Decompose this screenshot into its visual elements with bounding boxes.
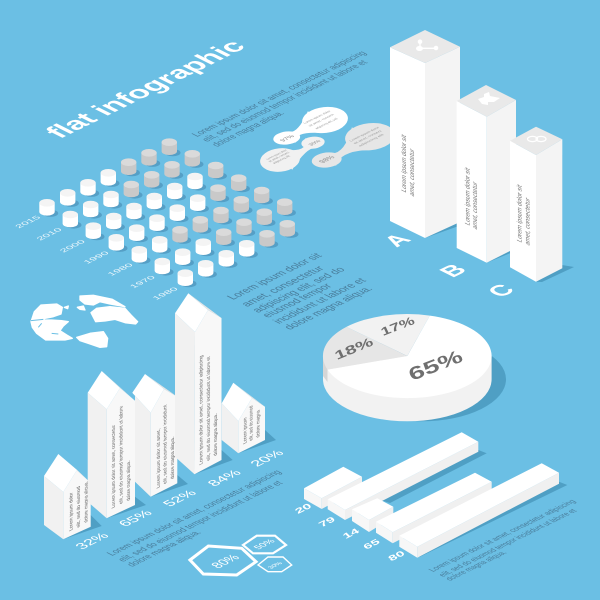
- year labels: 1980: [150, 286, 180, 301]
- bar value labels: 65: [361, 537, 382, 551]
- bar letters A B C: A: [378, 231, 417, 250]
- text block: centre paragraph: adipiscing elit, sed do: [250, 266, 348, 314]
- blob: white 97%: adipiscing elit, sed: [314, 117, 339, 130]
- text block: lower left paragraph: dolore magna aliqua.: [125, 529, 204, 568]
- blob: grey 98%: adipiscing elit: [357, 133, 385, 147]
- blob: white 97%: Lorem ipsum dolor: [302, 110, 333, 124]
- year labels: [13, 214, 180, 301]
- house bar 20%: [222, 383, 276, 453]
- pie chart: [323, 313, 506, 421]
- bar A text: amet, consectetur: [408, 146, 416, 198]
- text block: centre paragraph: eiusmod tempor: [260, 282, 335, 319]
- icon: molecule: [416, 40, 438, 50]
- bar C: [510, 127, 574, 282]
- year labels: 2000: [57, 239, 88, 254]
- year labels: 2015: [13, 214, 43, 229]
- blob: grey 98%: 98%: [318, 155, 337, 164]
- bar C text: Lorem ipsum dolor sit: [515, 182, 523, 244]
- bar value labels: 79: [317, 515, 337, 529]
- blob: light 30%: adipiscing elit: [272, 155, 291, 164]
- bar 80: [399, 463, 567, 558]
- text block: centre paragraph: amet, consectetur: [239, 265, 328, 308]
- house bar 65%: [88, 371, 146, 518]
- blob: grey 98%: [311, 121, 396, 169]
- cylinder row 2015: [39, 138, 180, 217]
- text: dolore magna aliqua.: [126, 459, 132, 502]
- hexagon 80%: 80%: [207, 552, 243, 570]
- house percentage labels: 65%: [115, 508, 156, 528]
- horizontal isometric bar chart: [293, 432, 567, 563]
- hexagon 50%: 50%: [251, 538, 277, 551]
- pie slice 17%: [346, 314, 430, 356]
- bar value labels: 14: [341, 526, 363, 540]
- bar letters A B C: [378, 231, 521, 301]
- text: elit, sed do eiusmod tempor incididunt ut labore et: [206, 355, 212, 462]
- text: elit, sed do eiusmod: [249, 404, 254, 442]
- cylinder row 1990: [109, 174, 250, 252]
- title: flat infographic: [39, 36, 252, 142]
- text: elit, sed do eiusmod tempor incididunt: [163, 403, 168, 485]
- text: dolore magna: [256, 408, 261, 439]
- text: Lorem ipsum dolor sit amet, consectetur: [111, 423, 117, 509]
- text block: lower left paragraph: elit, sed do eiusmod tempor incididunt ut labore et: [116, 480, 286, 563]
- blob: white 97%: sit amet, consect: [307, 113, 335, 127]
- icon: puzzle: [478, 92, 500, 105]
- pie labels: 18%: [332, 335, 375, 362]
- bar value labels: 20: [293, 502, 314, 515]
- blob: light 30%: [259, 136, 325, 174]
- text block: top paragraph: elit, sed do eiusmod tempor incididunt ut labore et: [200, 59, 371, 143]
- pie labels: 17%: [378, 313, 417, 338]
- cylinder row 2000: [86, 162, 227, 240]
- house percentage labels: 20%: [246, 448, 288, 468]
- bar B: [457, 85, 518, 263]
- bar 65: [376, 473, 492, 543]
- text: [69, 479, 89, 532]
- blob callouts: [259, 105, 396, 174]
- hexagon badges: [190, 536, 292, 575]
- house bar 84%: [175, 293, 233, 474]
- bar letters A B C: C: [482, 281, 521, 301]
- bar 20: [304, 467, 362, 509]
- house percentage labels: [71, 448, 288, 551]
- bar value labels: 80: [386, 549, 407, 563]
- text block: lower left paragraph: [105, 469, 286, 568]
- bar C text: [515, 182, 531, 247]
- pie slice 18%: [323, 327, 407, 370]
- text: [199, 354, 219, 466]
- year labels: 1990: [81, 250, 111, 265]
- bar 79: [328, 432, 487, 520]
- pie labels: [332, 313, 466, 385]
- blob: light 30%: sit amet, consect: [267, 151, 291, 163]
- text: [111, 404, 132, 509]
- text: [156, 403, 176, 489]
- cylinder row 1970: [155, 198, 296, 276]
- icon: world map: [31, 295, 138, 347]
- bar letters A B C: B: [434, 261, 473, 281]
- bar C text: amet, consectetur: [523, 195, 531, 247]
- house bar chart: [44, 293, 276, 539]
- year labels: 2010: [34, 227, 64, 242]
- blob: grey 98%: Lorem ipsum dolor: [348, 126, 381, 142]
- text: dolore magna aliqua.: [84, 479, 89, 524]
- cylinder row 2010: [63, 150, 203, 229]
- text block: top paragraph: Lorem ipsum dolor sit amet, consectetur adipiscing: [190, 50, 370, 138]
- text block: centre paragraph: [225, 252, 376, 331]
- text: elit, sed do eiusmod: [76, 485, 82, 529]
- text: Lorem ipsum dolor sit amet, consectetur adipiscing: [199, 354, 204, 466]
- bar value labels: [293, 502, 407, 563]
- blob: white 97%: [273, 105, 349, 146]
- cylinder row 1980: [132, 187, 273, 264]
- house bar 32%: [44, 454, 102, 539]
- blob: light 30%: Lorem ipsum dolor: [265, 149, 289, 160]
- house percentage labels: 52%: [159, 488, 200, 508]
- text block: centre paragraph: incididunt ut labore et: [271, 277, 370, 325]
- text: elit, sed do eiusmod tempor incididunt ut labore: [119, 404, 124, 505]
- text: Lorem ipsum dolor: [69, 491, 74, 532]
- text: dolore magna aliqua.: [213, 412, 219, 457]
- blob: grey 98%: sit amet, consect: [352, 130, 383, 145]
- bar 14: [352, 498, 393, 532]
- text: Lorem ipsum dolor sit amet,: [156, 427, 162, 489]
- text: Lorem ipsum: [243, 416, 248, 445]
- bar A text: Lorem ipsum dolor sit: [400, 132, 408, 194]
- pie labels: 65%: [406, 347, 466, 385]
- cylinder grid chart: [39, 138, 298, 287]
- text: [243, 404, 261, 445]
- text block: top paragraph: dolore magna aliqua.: [210, 110, 288, 148]
- house percentage labels: 32%: [71, 530, 113, 551]
- house percentage labels: 84%: [204, 467, 245, 488]
- blob: light 30%: 30%: [307, 139, 323, 147]
- year labels: 1980: [105, 262, 135, 277]
- text: dolore magna aliqua.: [170, 435, 176, 480]
- year labels: 1970: [127, 274, 158, 289]
- icon: infinity: [528, 136, 546, 142]
- bar A: [390, 30, 470, 238]
- text block: lower right paragraph: dolore magna aliqua.: [443, 549, 509, 582]
- 3D bars A B C: [390, 30, 574, 282]
- pie slice 65%: [328, 316, 492, 398]
- text block: top paragraph: [190, 50, 371, 148]
- blob: white 97%: 97%: [279, 134, 297, 143]
- bar B text: [463, 165, 479, 231]
- house bar 52%: [132, 374, 188, 497]
- bar B text: Lorem ipsum dolor sit: [463, 165, 471, 227]
- hexagon 30%: 30%: [267, 561, 285, 570]
- bar B text: amet, consectetur: [471, 179, 479, 231]
- text block: centre paragraph: Lorem ipsum dolor sit: [225, 252, 326, 301]
- bar A text: [400, 132, 416, 198]
- text block: lower left paragraph: Lorem ipsum dolor sit amet, consectetur adipiscing: [105, 469, 285, 557]
- text block: centre paragraph: dolore magna aliqua.: [282, 285, 376, 331]
- cylinder row 1980 front: [178, 220, 298, 287]
